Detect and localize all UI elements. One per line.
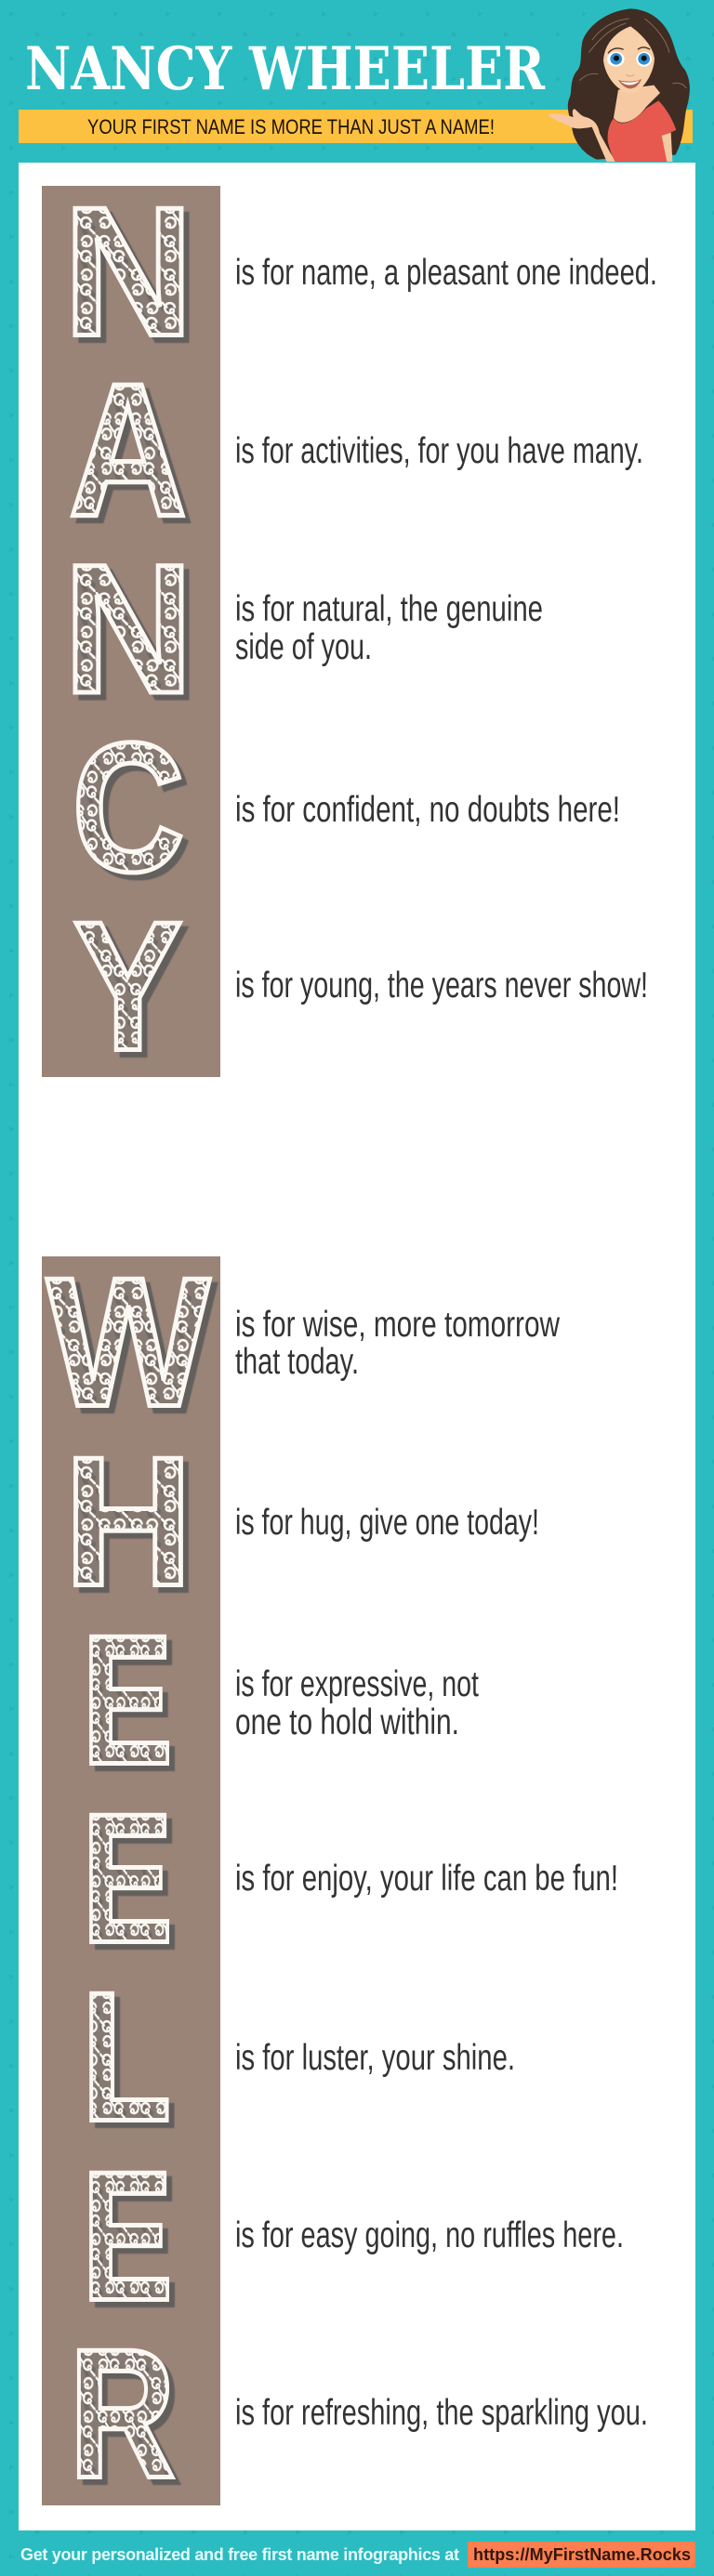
letter W: W xyxy=(46,1239,210,1445)
letter E: E xyxy=(82,1775,173,1981)
text: W line: is for wise, more tomorrow xyxy=(235,1305,561,1345)
letter N: N xyxy=(63,169,193,375)
illustration: woman xyxy=(549,8,690,162)
letter L: L xyxy=(82,1954,171,2159)
panel: WHEELER letters xyxy=(42,1239,220,2516)
subtitle banner: YOUR FIRST NAME IS MORE THAN JUST A NAME! xyxy=(87,115,495,138)
letter R: R xyxy=(69,2311,176,2516)
footer link badge xyxy=(468,2542,695,2568)
footer link badge: https://MyFirstName.Rocks xyxy=(473,2545,691,2564)
letter Y: Y xyxy=(73,883,182,1089)
text: E line xyxy=(235,1664,479,1742)
letter C: C xyxy=(72,704,185,910)
brown column: WHEELER xyxy=(42,1256,220,2505)
subtitle banner xyxy=(19,110,693,143)
text: L line: is for luster, your shine. xyxy=(235,2038,515,2078)
text: N line xyxy=(235,589,543,667)
letter E: E xyxy=(82,2133,173,2339)
text: E line: is for expressive, not xyxy=(235,1664,479,1704)
text: H line: is for hug, give one today! xyxy=(235,1503,539,1543)
letter H: H xyxy=(64,1419,192,1624)
letter E: E xyxy=(82,1597,173,1803)
brown column: NANCY xyxy=(42,186,220,1077)
text: N line: is for natural, the genuine xyxy=(235,589,543,629)
text: W line xyxy=(235,1305,561,1382)
text: E line: one to hold within. xyxy=(235,1702,459,1742)
letter N: N xyxy=(63,526,193,731)
footer text: Get your personalized and free first name infographics at xyxy=(20,2545,459,2564)
text: W line: that today. xyxy=(235,1342,359,1382)
title: NANCY WHEELER xyxy=(25,34,546,104)
text: N line: side of you. xyxy=(235,627,372,667)
letter A: A xyxy=(69,344,187,556)
panel: NANCY letters xyxy=(42,169,220,1089)
